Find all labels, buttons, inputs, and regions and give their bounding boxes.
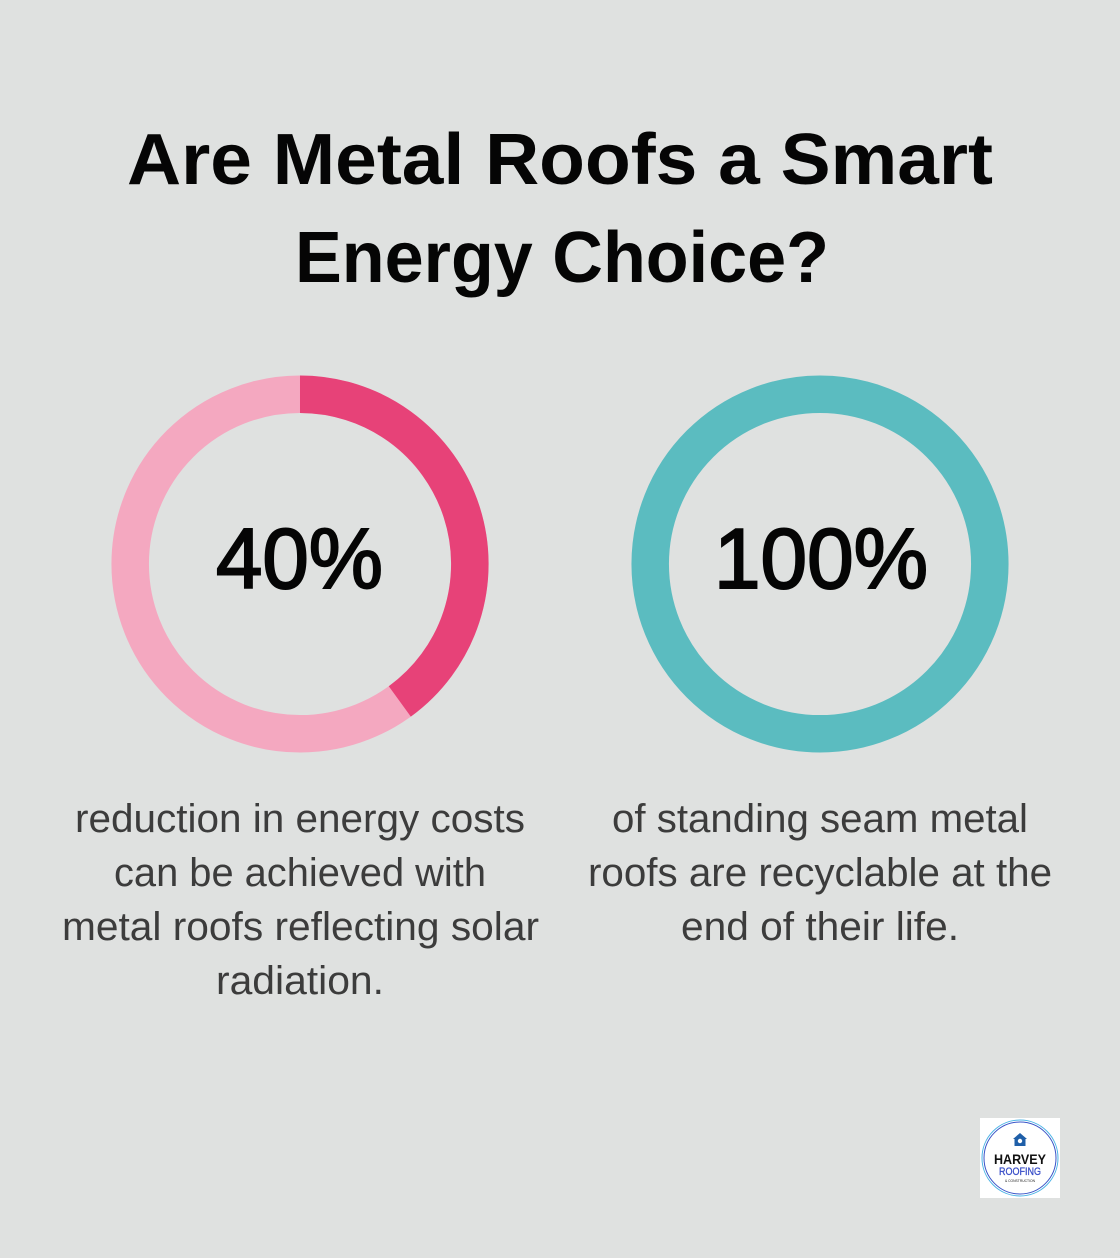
panel: 100% statistic bbox=[588, 394, 1052, 949]
panel: 40% statistic bbox=[62, 394, 539, 1003]
description: 40%: reduction in energy costs bbox=[75, 797, 525, 841]
icon: house with heart bbox=[1013, 1133, 1027, 1146]
description: 100%: end of their life. bbox=[681, 905, 959, 949]
title: Energy Choice? bbox=[295, 218, 829, 298]
description: 100%: of standing seam metal bbox=[612, 797, 1028, 841]
title: Are Metal Roofs a Smart bbox=[127, 120, 993, 200]
logo: Harvey Roofing: & CONSTRUCTION bbox=[1005, 1178, 1035, 1183]
description: 40%: can be achieved with bbox=[114, 851, 486, 895]
donut chart: 100% bbox=[650, 394, 990, 734]
description: 100%: roofs are recyclable at the bbox=[588, 851, 1052, 895]
description: 40%: metal roofs reflecting solar bbox=[62, 905, 539, 949]
description: 40% bbox=[62, 797, 539, 1003]
stat value: 100%: 100% bbox=[714, 512, 928, 607]
description: 100% bbox=[588, 797, 1052, 949]
title bbox=[127, 120, 993, 298]
logo: Harvey Roofing: HARVEY bbox=[994, 1151, 1047, 1167]
donut chart: 40% bbox=[130, 394, 470, 734]
description: 40%: radiation. bbox=[216, 959, 384, 1003]
logo: Harvey Roofing: ROOFING bbox=[999, 1166, 1041, 1178]
logo: Harvey Roofing bbox=[980, 1118, 1060, 1198]
stat value: 40%: 40% bbox=[216, 512, 383, 607]
